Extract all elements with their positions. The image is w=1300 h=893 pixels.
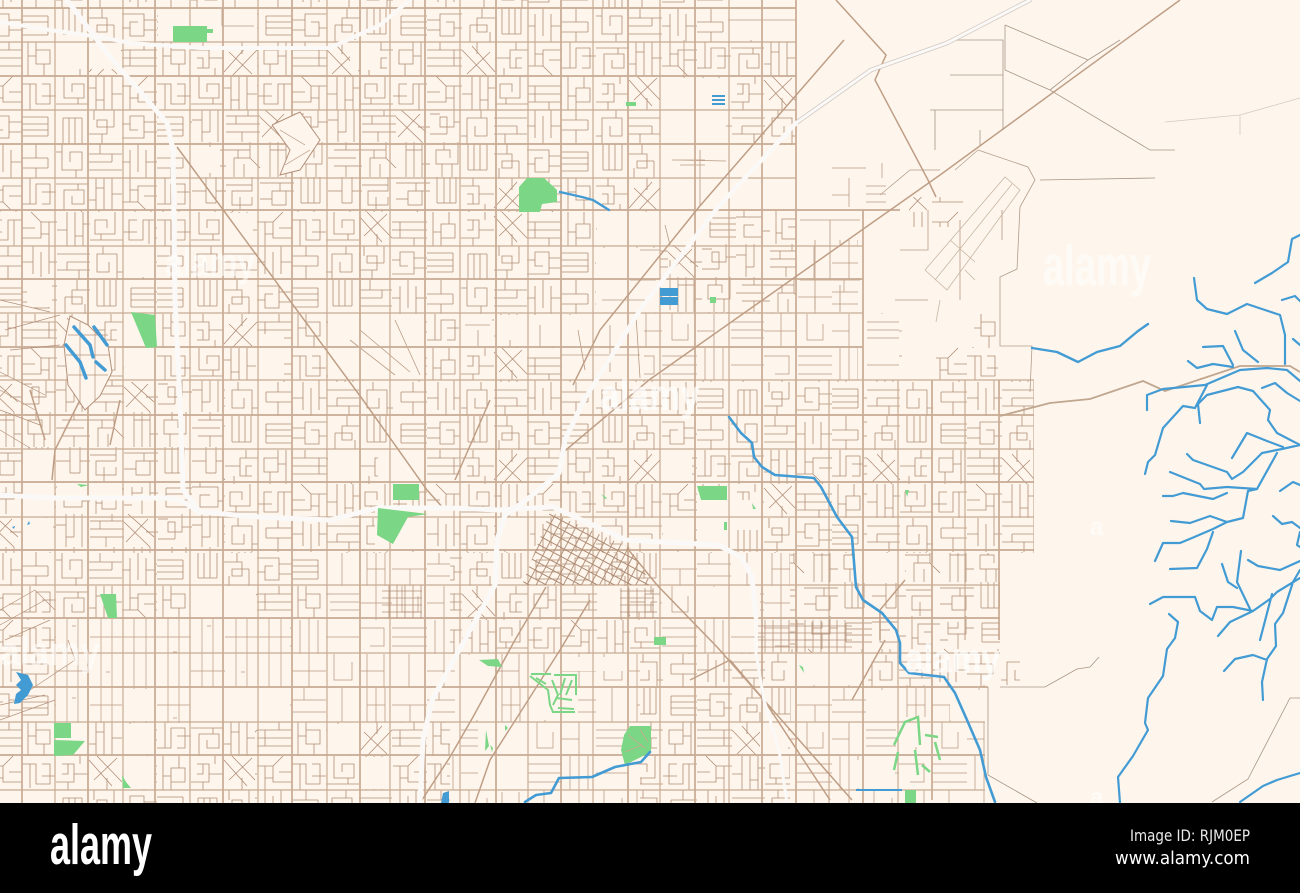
diagonal roads and railways [30, 0, 1180, 803]
golf course one [530, 674, 577, 712]
arterial road grid [0, 0, 1034, 803]
downtown rotated grid [522, 512, 652, 585]
street blocks texture [0, 0, 1034, 803]
website: www.alamy.com [1115, 848, 1250, 869]
rivers and washes [525, 192, 1300, 803]
northeast freeway casing [796, 0, 1030, 123]
freeway white fill [0, 0, 1030, 803]
watermark: alamy [905, 637, 1001, 681]
golf course two [621, 726, 651, 765]
sparse connector streets [190, 9, 1002, 378]
parks and golf courses [54, 26, 940, 803]
open land parcels without streets [23, 0, 990, 792]
watermark: alamy [600, 371, 700, 420]
watermark: alamy [1043, 234, 1151, 298]
outlying desert roads [930, 25, 1300, 803]
image id: Image ID: RJM0EP [1130, 826, 1250, 845]
watermark: alamy [165, 241, 256, 285]
watermark: a [1090, 514, 1104, 541]
watermark: a [1090, 784, 1104, 811]
canals in lake community [66, 327, 107, 378]
watermark [0, 234, 1151, 811]
watermark: alamy [0, 630, 101, 674]
water bodies [12, 95, 902, 803]
curved subdivision streets [0, 112, 1035, 720]
fine residential grid [382, 585, 852, 652]
logo wordmark: alamy [50, 813, 152, 877]
freeways [0, 0, 1030, 803]
footer bar [0, 803, 1300, 893]
golf course three [894, 717, 940, 775]
